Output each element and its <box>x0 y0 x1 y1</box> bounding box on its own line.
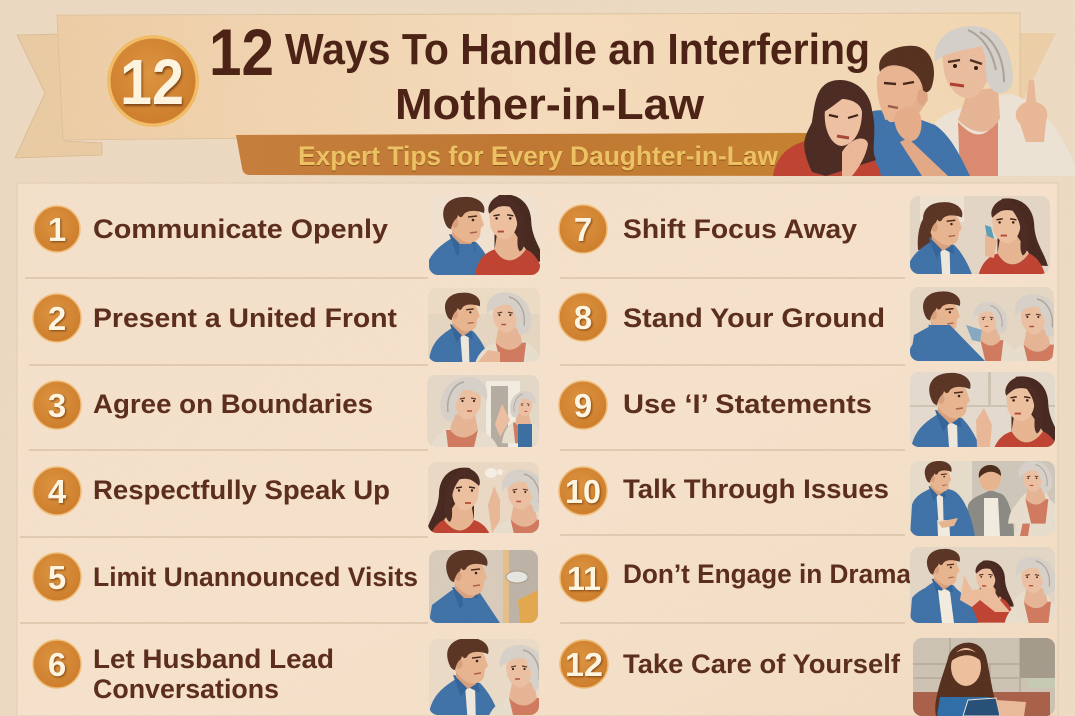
image 9: man and woman discussing <box>910 372 1055 447</box>
item 10: Talk Through Issues <box>559 467 889 515</box>
badge 4 <box>33 467 81 515</box>
header banner <box>15 13 1075 176</box>
image 12: woman reading a book <box>913 638 1055 716</box>
image 2: man and mother <box>428 288 540 362</box>
title: Mother-in-Law <box>395 80 705 129</box>
badge 6 <box>33 640 81 688</box>
badge 12 <box>560 640 608 688</box>
label 6: Let Husband Lead <box>93 644 334 674</box>
item 7: Shift Focus Away <box>559 205 857 253</box>
mother figure <box>935 26 1075 176</box>
badge 9: 9 <box>574 387 592 424</box>
man figure <box>868 46 970 176</box>
image 1: man and woman talking <box>429 195 540 275</box>
dividers <box>20 278 905 623</box>
badge 3: 3 <box>48 387 66 424</box>
label 2: Present a United Front <box>93 303 397 333</box>
image 3: mother at the door <box>427 375 539 447</box>
item 3: Agree on Boundaries <box>33 381 373 429</box>
item 6: Let Husband Lead Conversations <box>33 640 334 704</box>
badge 8 <box>559 293 607 341</box>
ribbon tail right <box>1018 33 1056 106</box>
badge 2: 2 <box>48 300 66 337</box>
badge 6: 6 <box>48 646 66 683</box>
badge 5: 5 <box>48 559 66 596</box>
label 6: Conversations <box>93 674 279 704</box>
label 4: Respectfully Speak Up <box>93 475 390 505</box>
item 5: Limit Unannounced Visits <box>33 553 418 601</box>
main badge: 12: 12 <box>120 46 184 118</box>
image 11: man, woman and mother arguing <box>910 547 1055 623</box>
image 4: woman speaking to mother <box>428 462 539 533</box>
image 6: man and mother <box>429 639 539 715</box>
item 1: Communicate Openly <box>34 206 388 252</box>
badge 5 <box>33 553 81 601</box>
subtitle bar <box>236 133 810 176</box>
label 10: Talk Through Issues <box>623 474 889 504</box>
badge 1 <box>34 206 80 252</box>
man fist <box>894 112 922 141</box>
label 3: Agree on Boundaries <box>93 389 373 419</box>
subtitle: Expert Tips for Every Daughter-in-Law <box>298 141 779 171</box>
item 4: Respectfully Speak Up <box>33 467 390 515</box>
badge 8: 8 <box>574 299 592 336</box>
header illustration: family <box>773 26 1075 176</box>
item 12: Take Care of Yourself <box>560 640 901 688</box>
badge 3 <box>33 381 81 429</box>
item 9: Use I Statements <box>559 381 872 429</box>
badge 12: 12 <box>565 646 603 683</box>
title: 12 <box>209 15 274 89</box>
image 10: three people talking <box>910 461 1063 536</box>
image 7: man and woman on phone <box>910 196 1050 274</box>
woman figure <box>773 80 881 176</box>
badge 11 <box>560 554 608 602</box>
raised hand <box>1016 80 1047 142</box>
banner body <box>57 13 1020 176</box>
label 6 <box>93 644 334 704</box>
label 7: Shift Focus Away <box>623 214 857 244</box>
badge 7 <box>559 205 607 253</box>
badge 4: 4 <box>48 473 67 510</box>
image 8: man with two women <box>910 287 1054 361</box>
label 11: Don’t Engage in Drama <box>623 559 912 589</box>
item 8: Stand Your Ground <box>559 293 885 341</box>
item 11: Don't Engage in Drama <box>560 554 912 602</box>
woman hand <box>842 138 868 176</box>
label 9: Use ‘I’ Statements <box>623 389 872 419</box>
content panel <box>17 183 1058 716</box>
title <box>209 15 870 129</box>
badge 10: 10 <box>565 473 601 510</box>
item 2: Present a United Front <box>33 294 397 342</box>
badge 2 <box>33 294 81 342</box>
main badge: 12 <box>107 35 199 127</box>
badge 10 <box>559 467 607 515</box>
title: Ways To Handle an Interfering <box>285 25 870 74</box>
badge 1: 1 <box>48 211 66 248</box>
image 5: man at door <box>429 550 538 623</box>
label 8: Stand Your Ground <box>623 303 885 333</box>
badge 7: 7 <box>574 211 592 248</box>
label 1: Communicate Openly <box>93 214 388 244</box>
badge 9 <box>559 381 607 429</box>
label 5: Limit Unannounced Visits <box>93 562 418 592</box>
ribbon tail left <box>15 34 102 158</box>
badge 11: 11 <box>567 560 601 597</box>
label 12: Take Care of Yourself <box>623 649 901 679</box>
